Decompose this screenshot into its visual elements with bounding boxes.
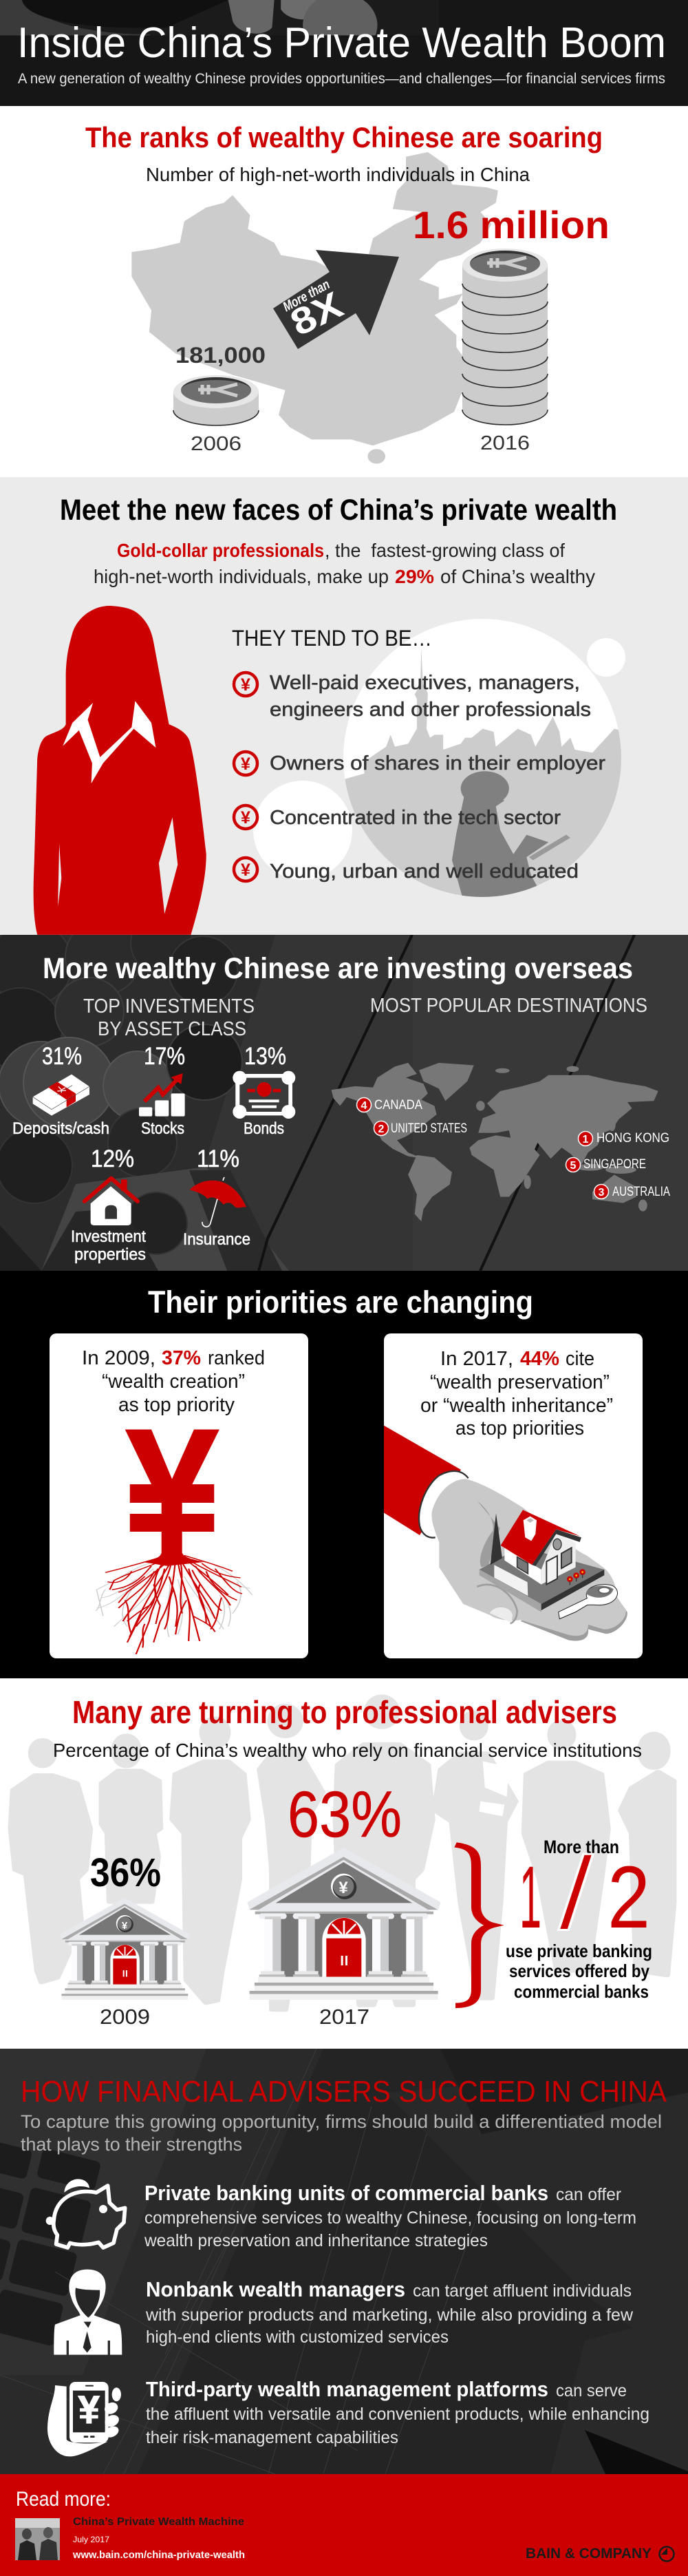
item: stocks 17%: 17%	[144, 1043, 185, 1070]
item: stocks 17%: Stocks	[141, 1119, 184, 1138]
list item: well-paid: engineers and other professionals	[270, 699, 591, 721]
panel: footer read more	[0, 2474, 688, 2576]
callout: more than 1/2	[506, 1835, 652, 2002]
text block: third-party platforms: Third-party wealth management platforms	[146, 2377, 548, 2401]
destination: Hong Kong: 1	[583, 1134, 589, 1146]
list item: tech sector: ¥	[241, 808, 250, 827]
icon: hand holding a house and key	[383, 1425, 627, 1641]
list item: owners of shares: Owners of shares in their employer	[270, 752, 605, 774]
list item: owners of shares: ¥	[241, 754, 250, 774]
callout: more than 1/2: services offered by	[509, 1961, 649, 1981]
card: 2017 wealth preservation: “wealth preservation”	[430, 1371, 610, 1393]
heading: Meet the new faces of China’s private wealth	[60, 494, 617, 527]
heading: Many are turning to professional advisers	[72, 1694, 617, 1730]
text block: nonbank wealth managers: Nonbank wealth managers	[146, 2277, 405, 2301]
title: Inside China’s Private Wealth Boom	[17, 19, 666, 67]
item: investment properties 12%: Investment	[71, 1227, 146, 1246]
year 2017: 2017	[319, 2005, 369, 2029]
destination: Hong Kong: HONG KONG	[596, 1131, 669, 1146]
arrow: more than 8X	[273, 250, 399, 349]
destination labels	[356, 1097, 670, 1199]
subheading: top investments	[83, 995, 255, 1040]
list item: young and urban: Young, urban and well educated	[270, 861, 579, 883]
icon: businesswoman silhouette	[34, 606, 206, 935]
item: insurance 11%	[183, 1146, 250, 1249]
panel: how financial advisers succeed	[0, 2049, 688, 2506]
destination: Australia: AUSTRALIA	[612, 1185, 670, 1199]
panel: investing overseas	[0, 912, 688, 1271]
report date: July 2017	[73, 2535, 109, 2544]
panel: professional advisers	[0, 1678, 688, 2049]
card: 2017 wealth preservation	[383, 1333, 643, 1658]
icon: small bank building	[60, 1898, 190, 2000]
item: bonds 13%: 13%	[244, 1043, 286, 1070]
report thumbnail	[15, 2518, 60, 2560]
card: 2017 wealth preservation: or “wealth inheritance”	[420, 1395, 613, 1417]
destination: Singapore: 5	[570, 1160, 577, 1172]
arrow: more than 8X: 8X	[284, 284, 350, 344]
China map silhouette	[131, 152, 498, 464]
text block: private banking units	[144, 2181, 636, 2250]
callout: more than 1/2: 1	[519, 1848, 541, 1947]
item: deposits/cash 31%: Deposits/cash	[12, 1119, 109, 1138]
text block: nonbank wealth managers: high-end clients with customized services	[146, 2327, 449, 2347]
card: 2009 wealth creation: 37%	[162, 1347, 201, 1369]
intro text: To capture this growing opportunity, firms should build a differentiated model	[21, 2111, 662, 2132]
icon: large bank building	[247, 1848, 441, 2000]
panel: new faces of private wealth	[0, 477, 688, 935]
item: investment properties 12%: properties	[74, 1245, 146, 1264]
panel: ranks of wealthy Chinese	[0, 106, 688, 477]
text block: third-party platforms: their risk-management capabilities	[146, 2428, 398, 2447]
intro text: of China’s wealthy	[440, 566, 595, 587]
callout: more than 1/2: /	[559, 1835, 593, 1951]
card: 2009 wealth creation: “wealth creation”	[102, 1371, 245, 1393]
value: 1.6 million: 1.6 million	[413, 203, 610, 246]
header photo of coin stacks and hands	[0, 0, 377, 36]
arrow: more than 8X: More than	[281, 277, 332, 315]
subheading: Number of high-net-worth individuals in China	[146, 164, 530, 185]
text block: private banking units: wealth preservation and inheritance strategies	[144, 2231, 488, 2250]
icon: piggy bank	[46, 2179, 125, 2248]
icon: small bank building: ¥	[122, 1920, 128, 1932]
intro text	[21, 2111, 662, 2155]
list item: well-paid	[234, 672, 591, 721]
text block: private banking units: can offer	[556, 2185, 621, 2204]
text block: nonbank wealth managers: with superior products and marketing, while also providing a few	[145, 2305, 634, 2325]
value: 181,000: 181,000	[175, 343, 266, 368]
subheading: top investments: BY ASSET CLASS	[98, 1018, 246, 1040]
year 2016: 2016	[480, 432, 530, 454]
card: 2009 wealth creation	[50, 1333, 308, 1658]
intro text	[94, 540, 595, 587]
year 2006: 2006	[191, 433, 241, 455]
read more label: Read more:	[16, 2488, 111, 2511]
logo: Bain &amp; Company: BAIN & COMPANY	[526, 2546, 652, 2562]
destination: Singapore: SINGAPORE	[583, 1157, 646, 1172]
item: deposits/cash 31%: 31%	[42, 1043, 82, 1070]
callout: more than 1/2: More than	[544, 1837, 619, 1857]
year 2009: 2009	[100, 2005, 150, 2029]
world map	[332, 1063, 658, 1221]
destination: Singapore	[566, 1157, 646, 1172]
heading: Their priorities are changing	[148, 1285, 533, 1320]
label: they tend to be: THEY TEND TO BE…	[232, 626, 432, 651]
text block: nonbank wealth managers	[145, 2277, 634, 2347]
brace	[455, 1845, 493, 2005]
card: 2017 wealth preservation: cite	[566, 1348, 594, 1370]
list item: well-paid: ¥	[241, 675, 250, 695]
item: insurance 11%: Insurance	[183, 1230, 250, 1249]
report URL: www.bain.com/china-private-wealth	[72, 2549, 245, 2561]
destination: Canada: CANADA	[374, 1098, 422, 1112]
destination: Canada: 4	[361, 1100, 367, 1112]
heading: More wealthy Chinese are investing overseas	[43, 952, 633, 985]
intro text: high-net-worth individuals, make up	[94, 566, 389, 587]
panel: priorities are changing	[0, 1271, 688, 1678]
subheading: destinations: MOST POPULAR DESTINATIONS	[370, 995, 647, 1017]
value: 63% in 2017: 63%	[288, 1778, 402, 1851]
report title: China’s Private Wealth Machine	[73, 2516, 244, 2528]
text block: third-party platforms: the affluent with versatile and convenient products, while enhancing	[146, 2405, 649, 2424]
panel: header banner	[0, 0, 688, 109]
subheading: Percentage of China’s wealthy who rely on financial service institutions	[53, 1740, 642, 1761]
subheading: top investments: TOP INVESTMENTS	[83, 995, 255, 1017]
item: deposits/cash 31%	[12, 1043, 109, 1138]
intro text: that plays to their strengths	[21, 2134, 242, 2155]
intro text: , the fastest-growing class of	[325, 540, 565, 561]
list item: young and urban: ¥	[241, 861, 250, 880]
callout: more than 1/2: 2	[608, 1848, 650, 1947]
photo background of calculator, ledger and banknotes	[0, 2049, 688, 2506]
card: 2009 wealth creation: In 2009,	[82, 1347, 155, 1369]
icon: large bank building: ¥	[338, 1879, 348, 1897]
destination: Australia	[594, 1184, 670, 1199]
item: insurance 11%: 11%	[197, 1146, 239, 1172]
icon: yen symbol with roots	[96, 1430, 252, 1654]
destination: United States: UNITED STATES	[391, 1121, 467, 1136]
card: 2017 wealth preservation: 44%	[520, 1348, 559, 1370]
card: 2009 wealth creation: as top priority	[118, 1394, 235, 1416]
card: 2017 wealth preservation: In 2017,	[440, 1348, 513, 1370]
destination: Australia: 3	[599, 1187, 605, 1199]
photo background of coins, banknotes and wood planks	[0, 935, 636, 1271]
text block: nonbank wealth managers: can target affluent individuals	[413, 2281, 632, 2301]
item: investment properties 12%	[71, 1146, 146, 1264]
item: stocks 17%	[139, 1043, 185, 1138]
text block: third-party platforms	[146, 2377, 649, 2447]
heading: The ranks of wealthy Chinese are soaring	[85, 121, 603, 154]
text block: private banking units: comprehensive services to wealthy Chinese, focusing on long-term	[144, 2208, 636, 2228]
destination: United States	[374, 1121, 467, 1136]
item: investment properties 12%: 12%	[91, 1146, 134, 1172]
card: 2009 wealth creation: ranked	[208, 1347, 265, 1369]
item: bonds 13%: Bonds	[244, 1119, 284, 1138]
intro text: Gold-collar professionals	[117, 540, 324, 561]
coin stack 2016	[462, 249, 548, 425]
destination: Canada	[356, 1097, 422, 1112]
illustration: circles with city skyline	[253, 619, 627, 902]
intro text: 29%	[395, 566, 434, 587]
coin 2006	[173, 375, 259, 425]
text block: third-party platforms: can serve	[556, 2381, 627, 2400]
list item: well-paid: Well-paid executives, managers,	[270, 672, 580, 694]
card: 2017 wealth preservation: as top priorities	[455, 1417, 584, 1439]
text block: private banking units: Private banking units of commercial banks	[144, 2181, 548, 2205]
icon: hand holding phone	[47, 2382, 121, 2456]
item: bonds 13%	[233, 1043, 295, 1138]
icon: wealth manager	[54, 2270, 122, 2355]
callout: more than 1/2: commercial banks	[514, 1981, 649, 2002]
subtitle: A new generation of wealthy Chinese provides opportunities—and challenges—for financial services firms	[18, 71, 665, 87]
value: 36% in 2009: 36%	[90, 1850, 161, 1895]
background: silhouettes of business people	[11, 1696, 674, 2010]
list item: tech sector: Concentrated in the tech sector	[270, 807, 561, 829]
callout: more than 1/2: use private banking	[506, 1941, 652, 1961]
destination: United States: 2	[378, 1123, 385, 1135]
